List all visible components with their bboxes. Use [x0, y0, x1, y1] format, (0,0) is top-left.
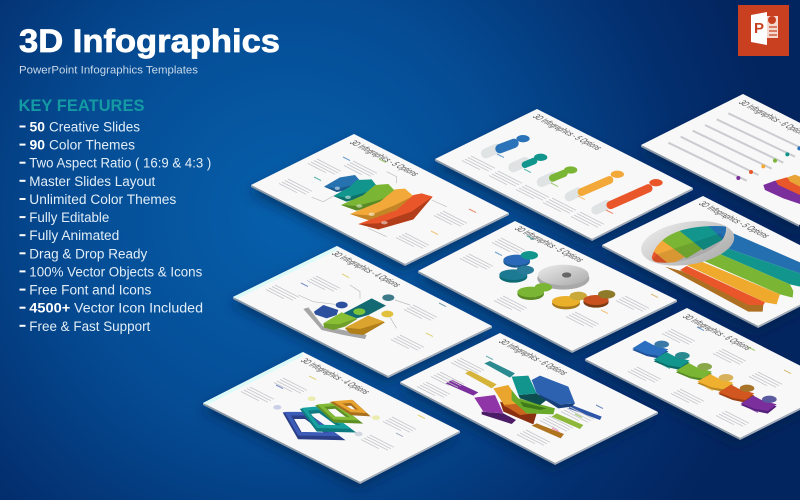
block chart — [298, 285, 410, 339]
slide title: 3D Infographics - 6 Options — [495, 338, 570, 377]
feature list: Fully Editable — [29, 210, 109, 225]
feature list — [20, 120, 211, 334]
ring chart with arrow bands — [638, 215, 800, 312]
feature list: Vector Icon Included — [74, 301, 203, 316]
slide title: 3D Infographics - 4 Options — [328, 250, 403, 289]
feature list: 90 — [30, 138, 45, 153]
panel: slide top right, 6 options bars — [641, 94, 800, 227]
bar chart — [486, 135, 663, 210]
feature list: 100% Vector Objects & Icons — [29, 264, 203, 279]
feature list: Unlimited Color Themes — [29, 192, 177, 207]
slide title: 3D Infographics - 5 Options — [529, 113, 604, 152]
slide title: 3D Infographics - 5 Options — [511, 225, 586, 264]
feature list: Color Themes — [49, 138, 135, 153]
panel: slide with people-style discs — [418, 221, 677, 353]
panel: slide with three-dimensional blocks — [233, 246, 492, 378]
feature list: 50 — [30, 120, 45, 134]
panel: slide with ring and arrows — [602, 196, 800, 328]
panel: slide with six-step chain — [585, 308, 800, 440]
arrow bar chart — [446, 361, 602, 438]
feature list: Free Font and Icons — [29, 283, 152, 298]
feature list: Drag & Drop Ready — [29, 246, 148, 261]
slide title: 3D Infographics - 5 Options — [346, 139, 421, 178]
feature list: Free & Fast Support — [29, 319, 151, 334]
nested square frames — [273, 396, 380, 437]
panel: slide with arrow bars — [400, 333, 658, 465]
chain chart — [632, 341, 777, 414]
feature list: 4500+ — [29, 301, 70, 316]
feature list: Master Slides Layout — [29, 174, 156, 189]
slide title: 3D Infographics - 6 Options — [679, 313, 754, 352]
feature list: Fully Animated — [29, 228, 119, 243]
feature list: Two Aspect Ratio ( 16:9 & 4:3 ) — [29, 156, 211, 171]
subtitle: PowerPoint Infographics Templates — [19, 64, 199, 76]
panel: slide with stair chart — [251, 134, 509, 266]
panel: slide with five bars — [435, 109, 693, 241]
feature list: Creative Slides — [49, 120, 140, 134]
disc diagram — [499, 251, 615, 309]
slide title: 3D Infographics - 4 Options — [297, 357, 372, 396]
panel: slide with nested frames — [203, 352, 460, 484]
stair chart — [312, 172, 447, 237]
title: 3D Infographics — [19, 23, 280, 59]
heading: key features: KEY FEATURES — [18, 96, 144, 115]
icon: powerpoint logo — [738, 5, 789, 56]
icon: powerpoint logo: P — [754, 20, 764, 37]
